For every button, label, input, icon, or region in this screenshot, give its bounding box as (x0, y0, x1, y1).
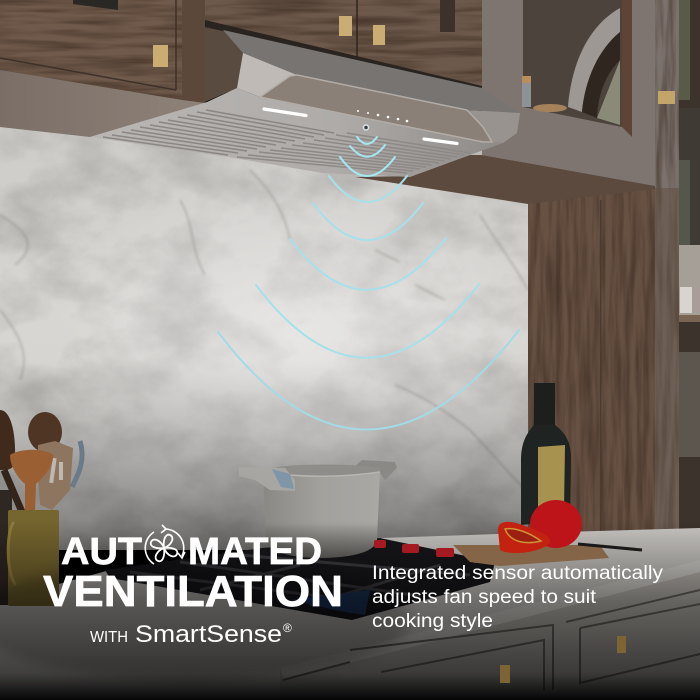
lower drawer fronts (283, 590, 700, 690)
heading word: automated, first part: AUT (61, 531, 142, 573)
door knob left (339, 16, 352, 36)
right wood side panel (528, 0, 679, 540)
arc 8 (218, 330, 519, 430)
line 3: cooking style (372, 611, 493, 632)
arc 5 (313, 203, 423, 240)
far right shelving (676, 0, 700, 540)
hood side reflection (205, 28, 243, 102)
arc 2 (350, 145, 385, 157)
utensil crock (0, 410, 82, 606)
marble backsplash (0, 120, 550, 550)
upper centre cabinet doors (205, 0, 485, 92)
lower wall shadow (0, 360, 530, 550)
hood sensor (364, 125, 368, 130)
cooktop red knobs (374, 540, 492, 563)
glass inner frame (622, 0, 632, 137)
hood top slope (223, 30, 520, 113)
hood control panel (260, 75, 492, 142)
subtitle (90, 621, 292, 648)
arc 7 (256, 284, 479, 358)
heading word: ventilation: VENTILATION (43, 567, 343, 616)
drawer pull right (617, 636, 626, 653)
hood light panel (237, 53, 297, 97)
cutting board and knife (453, 544, 642, 566)
hood front right (467, 110, 520, 143)
hood underside (90, 88, 503, 177)
registered mark: ® (283, 621, 292, 635)
fan icon (145, 525, 185, 564)
control indicators (357, 110, 408, 122)
left bottom shadow (0, 560, 410, 680)
line 2: adjusts fan speed to suit (372, 587, 597, 608)
cabinet glass (523, 0, 622, 127)
left LED light (264, 109, 306, 116)
with: WITH (90, 629, 128, 646)
crock body (8, 510, 59, 606)
red peppers (498, 500, 582, 553)
sensor wave arcs (218, 137, 519, 430)
dark bottom gradient (0, 520, 700, 700)
olive oil bottle (521, 383, 571, 525)
arc 1 (357, 137, 377, 144)
cooktop (105, 538, 495, 620)
range hood (90, 28, 520, 177)
upper right glass cabinet (482, 0, 675, 187)
under-cabinet shadow band (355, 155, 655, 204)
arc 4 (329, 176, 407, 202)
drawer pull left (500, 665, 510, 683)
arc 6 (290, 238, 446, 290)
smartsense brand: SmartSense (135, 621, 282, 648)
arc 3 (340, 157, 395, 176)
cooking pot (239, 460, 397, 558)
cabinet soffit (0, 70, 205, 137)
title (43, 525, 343, 616)
heading word: automated, second part: MATED (188, 531, 322, 573)
left filter vent (103, 110, 334, 155)
upper left cabinet (0, 0, 205, 104)
line 1: Integrated sensor automatically (372, 563, 664, 584)
door knob right (373, 25, 385, 45)
cabinet knob (153, 45, 168, 67)
counter and lower cabinets (0, 528, 700, 700)
right filter vent (237, 133, 470, 173)
right LED light (424, 139, 457, 144)
cabinet knob right (658, 91, 675, 104)
feature description (372, 563, 664, 632)
glass jars (522, 78, 531, 107)
